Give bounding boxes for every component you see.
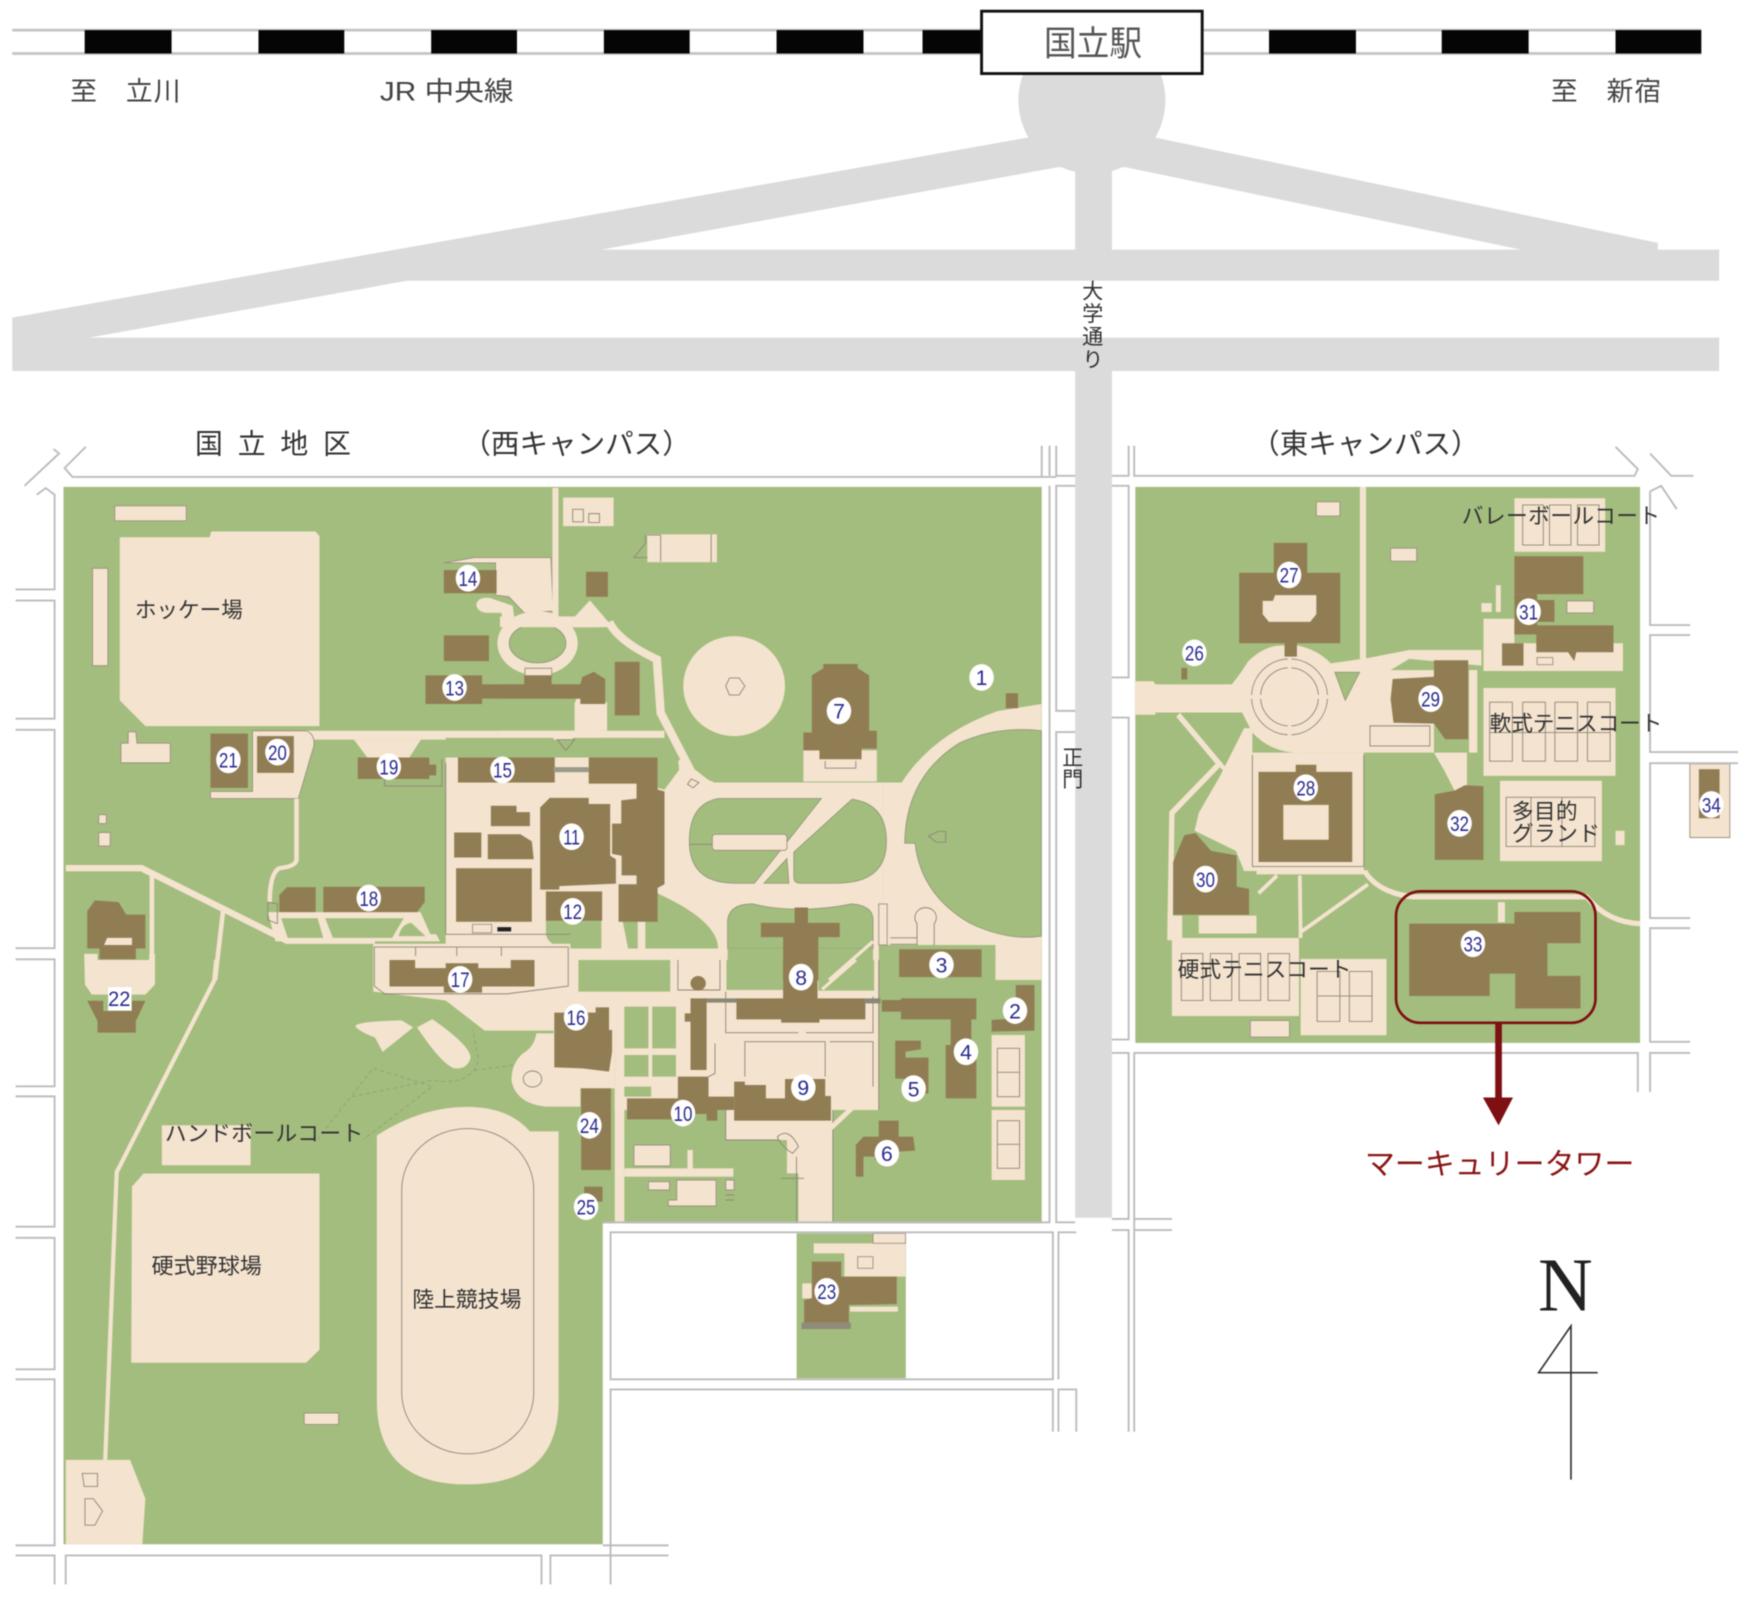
building 6: 6 [881,1143,893,1166]
building 33: Mercury Tower: 33 [1463,934,1482,957]
volleyball court [1514,498,1605,552]
building 8: 8 [795,967,807,990]
building 32: 32 [1450,813,1469,836]
building 27: 27 [1280,565,1299,588]
building 2 [992,985,1034,1032]
road label: Daigaku-dori: 大学通り [1079,279,1103,371]
soft tennis courts [1483,688,1616,776]
building 28: 28 [1296,778,1315,801]
building 11 [540,798,616,890]
building 1 gatehouse: 1 [976,667,987,690]
baseball field label: 硬式野球場 [152,1254,262,1279]
building 9 [734,1074,831,1121]
athletics field label: 陸上競技場 [412,1287,521,1312]
building 17: 17 [451,969,470,992]
building 26 [1181,640,1207,679]
building 16 [554,1004,612,1072]
Mercury Tower label: マーキュリータワー [1365,1148,1634,1181]
building 10: 10 [674,1103,692,1126]
west campus heading: （西キャンパス） [462,428,691,459]
building 18: 18 [359,888,378,911]
building 14: 14 [458,568,478,591]
building 3 [899,949,982,978]
athletics track [377,1107,559,1484]
rail direction label: Tachikawa: 至 立川 [70,76,180,106]
building 30 [1173,833,1249,915]
building 9: 9 [797,1077,809,1100]
building 23 [801,1262,897,1329]
baseball field [131,1173,319,1363]
multi-purpose ground label: 多目的 [1512,799,1578,824]
rail direction label: Shinjuku: 至 新宿 [1551,76,1661,106]
annex grounds for building 23 [797,1233,906,1378]
road network to station [12,27,1719,1218]
multi-purpose ground [1500,781,1602,861]
railway: JR Chuo line [12,30,1701,54]
building 12 [546,891,602,925]
building 13 [425,635,640,715]
hard tennis courts [1172,938,1386,1035]
building 6 [856,1121,915,1177]
building 13: 13 [445,677,464,700]
labels for sports facilities [135,504,1662,1312]
east campus grounds [1135,487,1730,1043]
east wing beside building 11 [589,758,664,922]
hockey field [120,531,319,726]
building 8 [705,907,881,1023]
building 31 [1502,556,1613,666]
volleyball court label: バレーボールコート [1462,504,1660,529]
building 21: 21 [219,750,238,773]
building 22: 22 [108,988,130,1011]
building 25 [574,1187,603,1220]
building 16: 16 [567,1007,585,1030]
building 30: 30 [1196,869,1215,892]
building 31: 31 [1519,602,1538,625]
buildings west of building 11 [454,806,534,933]
building 15 [458,757,589,783]
building 4: 4 [960,1042,972,1065]
building 2: 2 [1009,1000,1021,1023]
building 28 [1259,765,1352,862]
multi-purpose ground label second line: グランド [1512,821,1600,846]
building 25: 25 [577,1196,596,1219]
wing west of building 8 [685,976,707,1070]
east campus heading: （東キャンパス） [1251,428,1480,459]
building 24: 24 [580,1115,599,1138]
building 4 [882,998,978,1098]
north arrow: N [1538,1243,1593,1327]
building 12: 12 [563,901,582,924]
building 19 [354,740,442,786]
handball court [162,1125,251,1165]
street outlines [16,446,1738,1584]
building 33: Mercury Tower [1409,912,1580,1008]
building 29 [1391,660,1468,739]
hard tennis court label: 硬式テニスコート [1178,957,1351,982]
station box: Kunitachi [982,11,1202,74]
building 34: 34 [1702,794,1721,817]
building 10 [627,1077,734,1126]
building 27 [1239,543,1340,657]
station box: Kunitachi: 国立駅 [1044,26,1142,64]
building 20: 20 [268,742,287,765]
rail line label: JR 中央線 [380,76,514,106]
building 7: 7 [833,701,845,724]
building 24 [577,1088,611,1170]
soft tennis court label: 軟式テニスコート [1490,711,1662,736]
callout box around Mercury Tower [1396,891,1595,1023]
building 7 [803,664,877,781]
building 11: 11 [563,827,580,850]
building 1 gatehouse [969,664,1018,708]
handball court label: ハンドボールコート [165,1121,363,1146]
small building north of ring road [586,572,608,597]
building 17 [389,960,534,993]
building 19: 19 [379,756,398,779]
building 18 [279,885,425,912]
building 5 [895,1041,928,1102]
building 26: 26 [1185,643,1204,666]
building 23: 23 [817,1281,836,1304]
north arrow [1538,1243,1598,1480]
building 29: 29 [1421,688,1440,711]
hockey field label: ホッケー場 [135,597,243,622]
building 32 [1435,785,1483,860]
main gate label: 正門 [1059,747,1082,789]
district heading: 国立地区 [195,428,351,459]
building 14 [444,565,497,593]
arrow to Mercury Tower label [1483,1023,1513,1125]
building 22 [84,900,155,1033]
building 21 [210,734,248,788]
building 3: 3 [936,955,947,978]
building 5: 5 [908,1078,920,1101]
building 34 [1699,769,1724,818]
building 15: 15 [493,760,512,783]
west campus grounds [64,487,1042,1544]
building 20 [257,736,294,773]
